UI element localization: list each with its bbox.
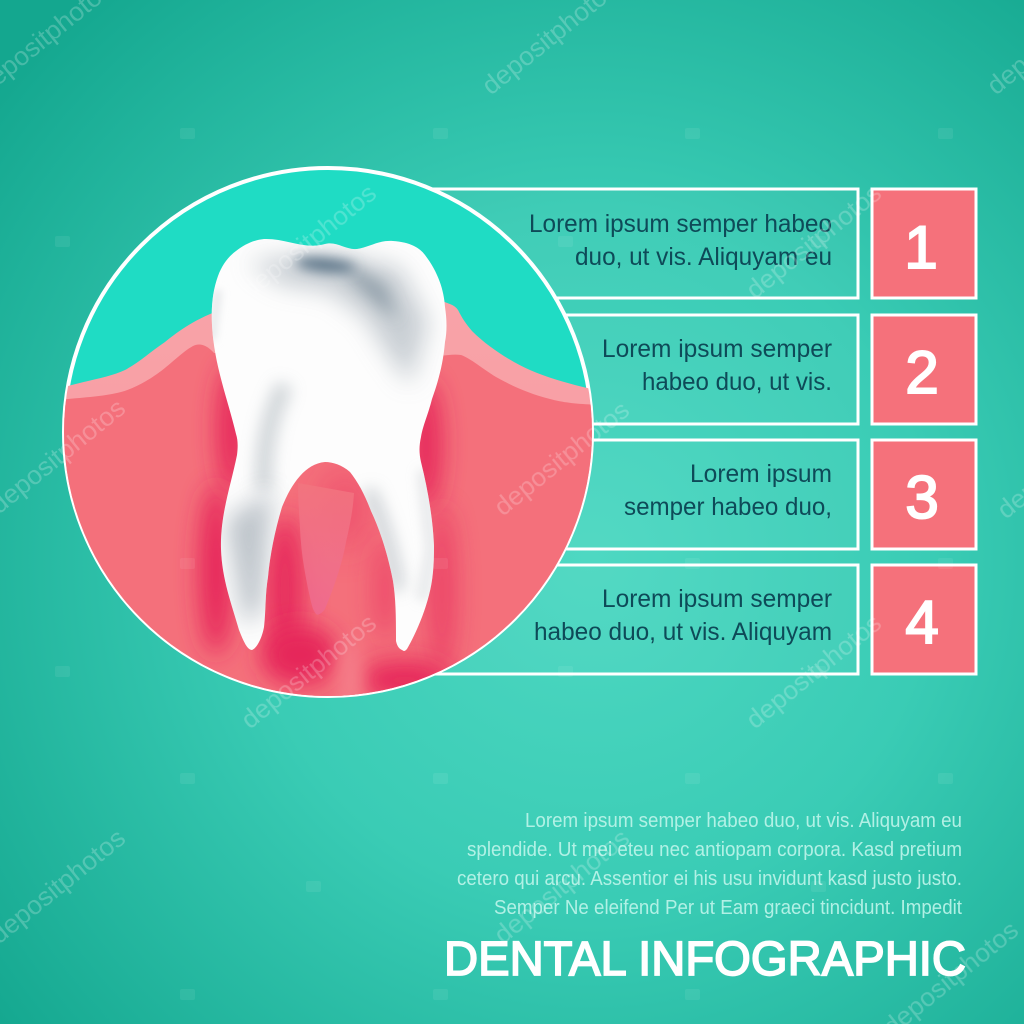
item 2 box: [330, 315, 858, 424]
item 2 text: Lorem ipsum semper: [602, 335, 832, 363]
title: DENTAL INFOGRAPHIC: [444, 933, 966, 986]
item 2 text: habeo duo, ut vis.: [642, 368, 832, 396]
inner root: [298, 483, 354, 615]
item 4 text: habeo duo, ut vis. Aliquyam: [534, 618, 832, 646]
item 4 number tile: [872, 565, 976, 674]
watermarks: depositphotos: [235, 177, 382, 305]
item 2 text: [602, 335, 832, 396]
gum shading: [199, 365, 456, 700]
item 2 number tile: [872, 315, 976, 424]
gum light streak: [338, 638, 362, 722]
item 4 box: [330, 565, 858, 674]
description text block: [457, 810, 962, 919]
item 1 text: [529, 210, 832, 271]
description text block: splendide. Ut mei eteu nec antiopam corpora. Kasd pretium: [467, 839, 962, 861]
watermarks: depositphotos: [740, 607, 887, 735]
item 2 number tile: 2: [905, 339, 939, 406]
illustration: tooth in gum circle: [50, 168, 600, 722]
item 3 number tile: [872, 440, 976, 549]
item 3 box: [330, 440, 858, 549]
item 4 number tile: 4: [905, 589, 939, 656]
item 1 number tile: 1: [904, 214, 938, 281]
gum body: [64, 344, 592, 696]
panel: item 1: [330, 189, 976, 298]
watermark camera marks: [55, 128, 953, 1000]
circle backdrop: [64, 168, 592, 696]
item 1 box: [330, 189, 858, 298]
item 3 text: [624, 460, 832, 521]
item 3 number tile: 3: [905, 464, 939, 531]
item 3 text: semper habeo duo,: [624, 493, 832, 521]
panel: item 2: [330, 315, 976, 424]
description text block: Lorem ipsum semper habeo duo, ut vis. Aliquyam eu: [525, 810, 962, 832]
panel: item 3: [330, 440, 976, 549]
watermarks: depositphotos: [488, 822, 635, 950]
description text block: Semper Ne eleifend Per ut Eam graeci tincidunt. Impedit: [494, 897, 962, 919]
item 3 text: Lorem ipsum: [690, 460, 832, 488]
tooth: [212, 239, 446, 651]
watermarks: depositphotos: [235, 607, 382, 735]
tooth shading: [212, 252, 432, 625]
item 1 text: Lorem ipsum semper habeo: [529, 210, 832, 238]
item 4 text: [534, 585, 832, 646]
gum: [64, 302, 592, 696]
item 1 text: duo, ut vis. Aliquyam eu: [575, 243, 832, 271]
item 1 number tile: [872, 189, 976, 298]
panel: item 4: [330, 565, 976, 674]
watermarks: depositphotos: [740, 177, 887, 305]
gum highlight band: [50, 300, 600, 720]
item 4 text: Lorem ipsum semper: [602, 585, 832, 613]
tooth body: [212, 239, 446, 651]
description text block: cetero qui arcu. Assentior ei his usu invidunt kasd justo justo.: [457, 868, 962, 890]
watermarks: depositphotos: [488, 394, 635, 522]
